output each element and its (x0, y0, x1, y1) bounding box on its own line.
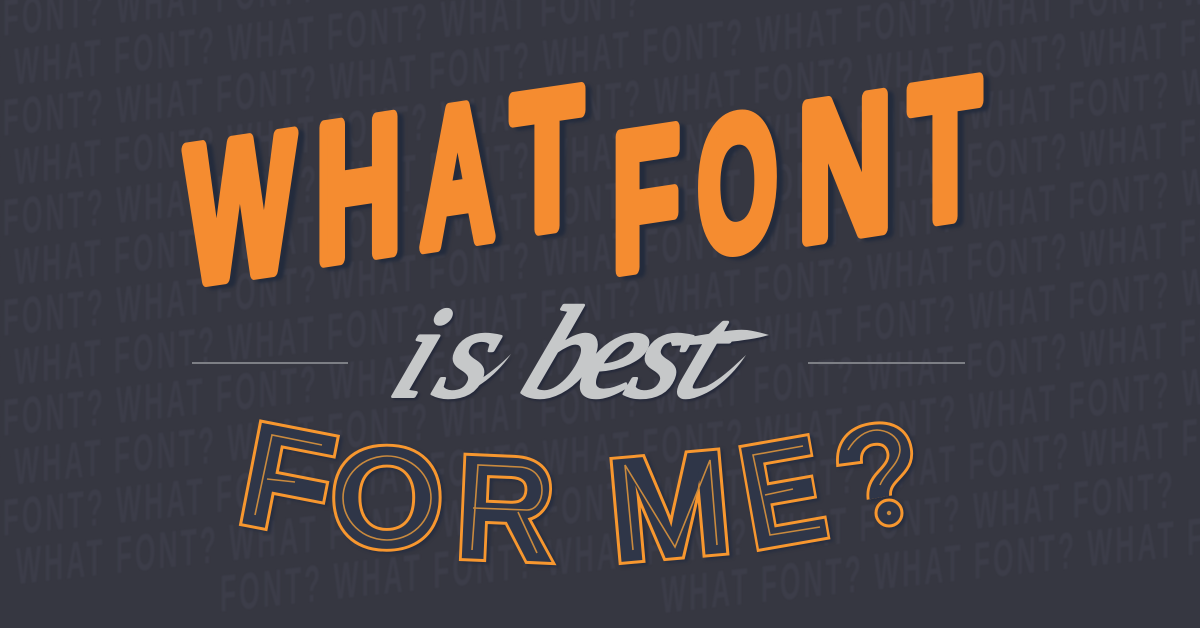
outlined letters: outer orange contour: O (330, 419, 444, 577)
heading: FONT: T (909, 39, 981, 266)
right divider line (808, 362, 965, 364)
outlined letters: outer orange contour: E (729, 406, 837, 580)
outlined letters: outer orange contour: ? (823, 390, 935, 565)
outlined letters: dark interior: ? (823, 390, 935, 565)
outlined letters: dark interior: E (729, 406, 837, 580)
heading: WHAT: H (316, 75, 401, 304)
background pattern: repeated WHAT FONT? text: FONT? WHAT FONT? WHAT FONT? WHAT FONT? WHAT FONT? (220, 460, 1176, 623)
outlined letters: outer orange contour: M (601, 420, 738, 593)
outlined letters: dark interior: M (601, 420, 738, 593)
question mark dot centre (887, 511, 891, 515)
heading: FONT: O (698, 72, 777, 295)
question mark ring dot (876, 500, 902, 526)
left divider line (192, 362, 348, 364)
outlined letters: outer orange contour (609, 421, 916, 567)
inline accent strokes in outlined letters (255, 430, 900, 553)
heading: WHAT: W (186, 91, 294, 324)
heading: FONT: N (798, 53, 892, 283)
heading: WHAT: A (420, 61, 495, 289)
heading: FONT (612, 39, 981, 313)
heading: WHAT (186, 47, 583, 324)
outlined letters: dark interior (228, 391, 558, 593)
outlined letters: dark interior (612, 424, 910, 562)
outlined letters: dark interior: F (228, 391, 347, 568)
heading: WHAT: T (511, 47, 583, 274)
outlined letters: outer orange contour (228, 391, 558, 593)
outlined letters: dark interior: R (452, 426, 558, 593)
heading: FONT: F (612, 86, 680, 313)
script subheading: is best: is best (374, 282, 756, 425)
heading: FOR (228, 391, 558, 593)
heading: ME? (609, 421, 916, 567)
outlined letters: outer orange contour: F (228, 391, 347, 568)
outlined letters: dark interior: O (330, 419, 444, 577)
s and t swashes and t crossbar (450, 330, 769, 398)
outlined letters: outer orange contour: R (452, 426, 558, 593)
